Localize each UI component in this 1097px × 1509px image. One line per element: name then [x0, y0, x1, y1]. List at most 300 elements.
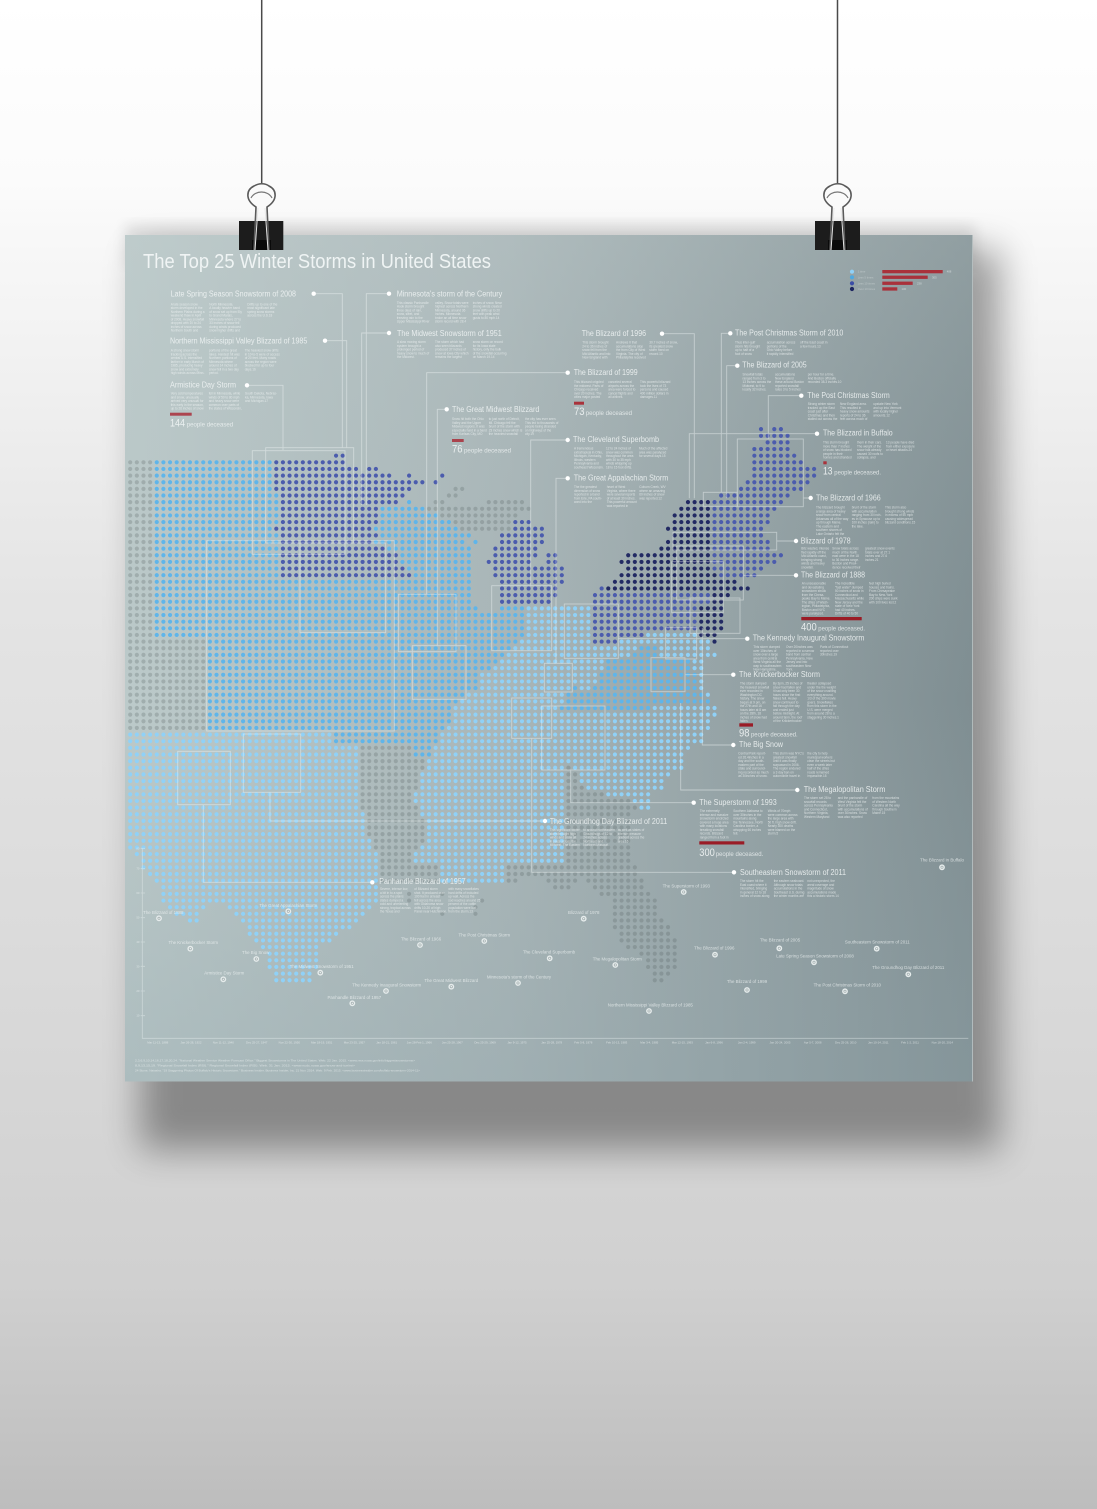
body text: everything around. — [807, 693, 833, 697]
body text: a bit in to a spot — [380, 891, 402, 895]
body text: the heaviest snowfall — [740, 685, 769, 689]
body text: especially hard in a band — [452, 428, 487, 432]
body text: arrived very unusual for — [171, 399, 204, 403]
body text: all airlines. — [608, 395, 623, 399]
body text: the from City of West — [616, 348, 645, 352]
heading: Blizzard of 1978 — [801, 536, 851, 545]
body text: accumulations atop — [616, 344, 643, 348]
body text: magnitude of snow — [807, 887, 834, 891]
body text: fell in Minnesota, while — [209, 392, 241, 396]
body text: from either exposure — [886, 444, 915, 448]
heading: The Post Christmas Storm of 2010 — [735, 329, 844, 338]
body text: ever recorded in — [740, 689, 763, 693]
body text: The weight of the — [857, 444, 881, 448]
poster background — [125, 235, 973, 1082]
body text: blocked for up to four — [245, 364, 274, 368]
body text: persons and caused — [640, 388, 669, 392]
body text: Much of the affected — [639, 446, 668, 450]
body text: This powerful blizzard — [640, 380, 671, 384]
body text: theater collapsed — [807, 682, 831, 686]
body text: dimension of snow — [574, 489, 601, 493]
heading: The Superstorm of 1993 — [699, 798, 777, 807]
y-axis labels: 60 — [136, 891, 140, 895]
body text: Arkansas all of the way — [816, 517, 849, 521]
body text: North Minnesota. — [209, 302, 233, 306]
body text: storm record with 28.4 — [435, 320, 466, 324]
body text: snowfall. — [801, 565, 814, 569]
panel: The Big Snow — [731, 740, 835, 778]
body text: Northern South and — [171, 329, 198, 333]
body text: 30inches.19 — [820, 652, 837, 656]
body text: staggering 30 inches.1 — [807, 715, 839, 719]
body text: the heaviest snowfall — [489, 432, 518, 436]
deaths bar — [699, 841, 744, 844]
deaths count: 73 — [574, 406, 584, 418]
body text: of 2008. Heavy snowfall — [171, 317, 204, 321]
date labels: Nov 11-12, 1940 — [213, 1040, 234, 1044]
body text: amounts.12 — [873, 413, 890, 417]
storm point labels: Late Spring Season Snowstorm of 2008 — [776, 954, 854, 958]
panel: The Knickerbocker Storm — [731, 670, 839, 740]
body text: Boston and NYC — [802, 608, 826, 612]
panel: The Kennedy Inaugural Snowstorm — [745, 634, 865, 672]
body text: The cities of Wash- — [802, 600, 828, 604]
body text: until it was finally — [773, 759, 797, 763]
legend swatches — [850, 270, 854, 291]
body text: Northeast and — [583, 839, 603, 843]
body text: West Virginia felt the — [838, 800, 867, 804]
heading: The Big Snow — [739, 740, 783, 749]
body text: of the snow crushing — [807, 689, 836, 693]
body text: this early in the season, — [171, 403, 204, 407]
body text: from around 28 to a — [807, 712, 835, 716]
storm point labels: The Superstorm of 1993 — [663, 884, 711, 888]
deaths count: 300 — [699, 847, 715, 859]
body text: reported over — [820, 649, 839, 653]
legend values: 238 — [917, 281, 922, 285]
body text: inches of snow had — [740, 715, 767, 719]
body text: not unexpected, the — [807, 879, 835, 883]
body text: impassible.18 — [807, 774, 827, 778]
body text: hours since the first — [773, 693, 800, 697]
body text: surpassed in 2006. — [773, 763, 800, 767]
panel: The Blizzard of 1888 — [794, 570, 898, 634]
left binder clip — [239, 184, 283, 250]
body text: snow over a large — [753, 652, 778, 656]
heading: The Blizzard of 2005 — [742, 361, 807, 370]
body text: for its Iowa state — [473, 344, 496, 348]
body text: ranging from 30 inch- — [852, 513, 881, 517]
y-axis labels: 70 — [136, 867, 140, 871]
body text: reported in a narrow — [786, 649, 815, 653]
body text: shot. It produced over — [414, 891, 445, 895]
body text: snow fell in a two day — [209, 367, 239, 371]
body text: portions of the — [767, 344, 787, 348]
right hanging string — [836, 0, 838, 183]
body text: Ohio Valley before — [767, 348, 793, 352]
body text: Chicago received — [574, 388, 599, 392]
body text: over 20 inches. The — [574, 391, 602, 395]
body text: of snow has blocked — [823, 448, 852, 452]
body text: central U.S. intensified — [171, 356, 202, 360]
body text: and Connecticut, — [804, 807, 828, 811]
y-axis labels: 30 — [136, 964, 140, 968]
body text: An unseasonable — [802, 582, 826, 586]
body text: state and surround- — [738, 766, 766, 770]
body text: across the U.S.18 — [247, 314, 273, 318]
body text: the city to help — [807, 752, 828, 756]
body text: southeastern New — [786, 664, 812, 668]
medium blue dots: less than 5 times — [157, 462, 709, 754]
body text: was reported in — [607, 504, 628, 508]
right binder clip — [815, 184, 860, 250]
body text: in place across the — [550, 839, 576, 843]
body text: produced 37 inches of — [435, 348, 466, 352]
body text: Severe, intense low, — [380, 887, 408, 891]
poster shadow — [125, 225, 1000, 1150]
title: The Top 25 Winter Storms in United States — [143, 251, 491, 273]
body text: up through Maine. — [816, 520, 841, 524]
timeline axes — [141, 848, 968, 1038]
body text: The extremely — [700, 809, 720, 813]
body text: accumulations — [775, 372, 796, 376]
body text: breaking snowfall — [700, 828, 724, 832]
body text: This storm was NYC's — [773, 752, 804, 756]
body text: houses and trains. — [869, 585, 895, 589]
body text: Maine.15 — [872, 811, 885, 815]
body text: of snow set up from Ely — [209, 310, 242, 314]
panel: Armistice Day Storm: people deceased — [187, 422, 234, 429]
body text: during winds produced — [209, 325, 241, 329]
body text: inches of snow across — [171, 325, 202, 329]
body text: East coast where it — [740, 883, 767, 887]
body text: inches of snow along — [740, 894, 770, 898]
body text: Jersey and into — [786, 660, 808, 664]
body text: rates 3 to 5 inches — [775, 388, 801, 392]
body text: a 3 day ban on — [773, 770, 794, 774]
date labels: Jan 2-4, 1999 — [738, 1040, 756, 1044]
legend labels: Less 10 times — [858, 281, 876, 285]
poster content — [130, 251, 968, 1072]
body text: were common across — [768, 813, 798, 817]
body text: as well as states of — [618, 828, 644, 832]
heading: The Blizzard in Buffalo — [823, 429, 893, 438]
heading: The Great Appalachian Storm — [574, 473, 669, 482]
heading: The Blizzard of 1966 — [816, 493, 881, 502]
body text: storm.5 — [768, 832, 778, 836]
panel: The Groundhog Day Blizzard of 2011 — [543, 817, 668, 847]
body text: Carolina border, a — [733, 824, 759, 828]
legend values — [902, 270, 952, 291]
body text: Michigan, Kentucky, — [574, 454, 602, 458]
body text: A tremendous — [574, 446, 594, 450]
body text: foot of snow — [735, 352, 753, 356]
body text: feet with peak wind — [473, 312, 500, 316]
body text: The region endured — [773, 766, 801, 770]
body text: damages.11 — [640, 395, 657, 399]
body text: the states of Wisconsin, — [209, 406, 242, 410]
body text: over 30inches in the — [733, 813, 762, 817]
deaths count: 13 — [823, 465, 832, 477]
body text: The incredible — [835, 582, 855, 586]
panel: The Great Midwest Blizzard — [444, 405, 558, 455]
body text: intense and massive — [700, 813, 729, 817]
heading: The Groundhog Day Blizzard of 2011 — [550, 817, 668, 826]
body text: period. — [209, 371, 219, 375]
body text: feet across much of — [840, 417, 868, 421]
body text: snowfall records — [804, 800, 827, 804]
body text: it rapidly intensified — [767, 352, 794, 356]
date labels — [147, 1040, 953, 1044]
panel: The Blizzard of 1996 — [582, 329, 678, 360]
body text: to Grand Marais, — [209, 314, 233, 318]
body text: Snowfall totals — [742, 372, 763, 376]
body text: Very cold temperatures — [171, 392, 203, 396]
body text: across the region were — [245, 360, 277, 364]
deaths bar — [170, 413, 192, 416]
body text: more than 7 inches — [823, 444, 850, 448]
body text: snow from central — [816, 513, 841, 517]
panel: Late Spring Season Snowstorm of 2008 — [171, 290, 316, 333]
heading: The Post Christmas Storm — [807, 391, 890, 400]
body text: snow storm on record — [473, 340, 503, 344]
heading: Armistice Day Storm — [170, 380, 236, 389]
body text: 12 to 24 inches of — [606, 446, 631, 450]
body text: cancel flights and — [608, 391, 633, 395]
body text: tracked up the East — [808, 406, 835, 410]
date labels: Jan 25-28, 1967 — [442, 1040, 463, 1044]
body text: tracking across the — [171, 352, 197, 356]
body text: of the snowfall occurring — [473, 351, 507, 355]
body text: Philadelphia received — [616, 356, 646, 360]
body text: half of the cities — [807, 766, 830, 770]
body text: from Erie, PA south- — [574, 496, 602, 500]
body text: ranged from 3 to — [742, 376, 766, 380]
body text: people being stranded — [525, 424, 556, 428]
body text: caused 30 roofs to — [857, 452, 883, 456]
date labels: Jan 6-8, 1996 — [705, 1040, 723, 1044]
body text: Drifts of 40 to 50 — [835, 612, 858, 616]
body text: 400 million dollars in — [640, 391, 669, 395]
heading: Southeastern Snowstorm of 2011 — [740, 868, 846, 877]
body text: ington, Philadelphia, — [802, 604, 830, 608]
body text: around 9pm, the roof — [773, 715, 802, 719]
body text: took the lives of 73 — [640, 384, 666, 388]
body text: up wall. Across the — [448, 895, 475, 899]
deaths bar — [823, 461, 827, 464]
legend labels — [858, 270, 876, 291]
deaths count: 76 — [452, 443, 462, 455]
body text: New England — [775, 376, 794, 380]
body text: it had only been 30 — [773, 689, 800, 693]
body text: high winds across Minn- — [171, 371, 204, 375]
body text: highest across Northern — [435, 305, 469, 309]
y-axis labels: 40 — [136, 940, 140, 944]
body text: area from central — [753, 656, 777, 660]
body text: heavy snow amounts — [840, 410, 870, 414]
body text: most significant late — [247, 306, 275, 310]
body text: Nearly 300 deaths — [768, 824, 794, 828]
body text: of Blizzard storm — [414, 887, 438, 891]
heading: The Megalopolitan Storm — [804, 785, 886, 794]
body text: freezing rain to the — [397, 316, 423, 320]
body text: 50 ft. high snow drift. — [768, 820, 797, 824]
body text: area were forced to — [608, 388, 636, 392]
storm point labels: The Blizzard of 1888 — [143, 910, 184, 915]
body text: ka, Minnesota, Iowa — [245, 395, 273, 399]
body text: areal coverage and — [807, 883, 834, 887]
body text: 13 inches across the — [742, 380, 772, 384]
body text: Connecticut and — [835, 593, 858, 597]
body text: lakes. Hardest hit was — [209, 352, 240, 356]
body text: percent of the cattle — [448, 902, 476, 906]
body text: fallen. — [740, 719, 749, 723]
body text: on March 19.14 — [473, 355, 495, 359]
heading: The Blizzard of 1996 — [582, 329, 646, 338]
body text: heart of West — [607, 485, 625, 489]
deaths bar — [452, 439, 464, 442]
body text: accumulations in the — [774, 887, 803, 891]
date labels: Apr 5-7, 2008 — [804, 1040, 822, 1044]
body text: day and the south- — [738, 759, 764, 763]
body text: Coburn Creek, WV — [639, 485, 667, 489]
body text: states dumped a — [380, 898, 403, 902]
panel: The Post Christmas Storm of 2010 — [728, 329, 844, 356]
body text: through Southern — [872, 807, 897, 811]
body text: fell across the area — [414, 898, 441, 902]
body text: these around Boston — [775, 380, 804, 384]
heading: Minnesota's storm of the Century — [397, 290, 502, 299]
body text: area was paralyzed — [639, 450, 666, 454]
storm point labels: The Blizzard of 1966 — [401, 936, 442, 942]
body text: homes and stranded — [823, 456, 852, 460]
heading: Northern Mississippi Valley Blizzard of 1985 — [170, 336, 308, 345]
body text: dropped with 10 to 24 — [171, 321, 201, 325]
body text: snow at Iowa City which — [435, 351, 469, 355]
body text: 33 inches of snow fell — [209, 321, 240, 325]
footnotes: 24 Stone, Natasha. "19 Staggering Photos Of Buffalo's Historic Snowstorm." Business Insider. Business Insider, Inc. 21 Nov. 2014. Web. 9 Feb. 2015. <www.businessinsider.com/buffalo-snowstorm-2014-11> — [135, 1068, 420, 1072]
body text: Strong winter storm — [808, 402, 835, 406]
body text: The eastern and — [816, 524, 839, 528]
body text: Southeast U.S. during — [774, 890, 805, 894]
body text: population were lost — [448, 906, 476, 910]
storm point labels: Northern Mississippi Valley Blizzard of 1985 — [608, 1002, 693, 1008]
dot-grid map of the United States — [130, 429, 815, 980]
body text: cold and unrelenting — [380, 902, 409, 906]
body text: By 3pm, 25 inches of — [773, 682, 802, 686]
heading: The Blizzard of 1888 — [801, 570, 865, 579]
body text: intense pressure — [618, 832, 641, 836]
date labels: Dec 25-27, 1947 — [246, 1040, 268, 1044]
body text: of at least 30 inches. — [607, 496, 636, 500]
legend labels: 1 time — [858, 270, 866, 274]
body text: over 10inches of — [753, 649, 776, 653]
footnotes: 2,3,6,9,10,14,16,17,18,20,24. "National Weather Service Weather Forecast Office." Biggest Snowstorms in The United States. Web. 22 Jan. 2015. <www.nws.noaa.gov/info/biggestsnowstorms> — [135, 1058, 415, 1062]
body text: record.10 — [649, 352, 663, 356]
body text: or heart attacks.24 — [886, 448, 912, 452]
body text: fell. — [733, 832, 738, 836]
dark blue dots: less than 10 times — [276, 429, 815, 642]
body text: Lake Ontario felt the — [816, 532, 845, 536]
body text: 60 inches of snow — [639, 493, 665, 497]
body text: This led to thousands of — [525, 421, 558, 425]
y-axis labels: 20 — [136, 989, 140, 993]
body text: snow higher drifts and — [209, 329, 240, 333]
storm point labels: The Megalopolitan Storm — [593, 956, 642, 962]
body text: totals ever at 27.1 — [865, 550, 890, 554]
body text: whopping 60 inches — [733, 828, 761, 832]
body text: Pennsylvania and — [574, 462, 599, 466]
body text: throughout the area — [606, 454, 634, 458]
body text: mountains along — [733, 817, 757, 821]
body text: This significant winter — [550, 828, 580, 832]
body text: This storm dumped — [753, 645, 780, 649]
body text: snow drifts up to 20 — [473, 308, 500, 312]
body text: Panel near Hutchinson. — [414, 910, 447, 914]
footnotes: 8,9,13,15,19. "Regional Snowfall Index (RSI)." Regional Snowfall Index (RSI). Web. 31 Jan. 2015. <www.ncdc.noaa.gov/snow-and-ice/rsi> — [135, 1064, 355, 1068]
body text: The heaviest snow drifts — [245, 348, 279, 352]
body text: Midwest. The Eastern — [550, 843, 580, 847]
body text: A slow moving storm — [397, 340, 426, 344]
body text: the Texas and — [380, 910, 400, 914]
legend labels: Less 5 times — [858, 275, 874, 279]
body text: the eastern seaboard. — [774, 879, 804, 883]
body text: 1985, producing heavy — [171, 364, 203, 368]
body text: Mid Atlantic and into — [582, 352, 611, 356]
body text: from the mountains — [872, 796, 900, 800]
body text: 200 ships were sunk — [869, 596, 898, 600]
body text: eastern part of the — [738, 763, 764, 767]
body text: The storm set 28 to — [804, 796, 831, 800]
body text: around 14 inches of — [209, 364, 237, 368]
panel: The Cleveland Superbomb — [566, 435, 668, 469]
body text: brunt of the storm — [838, 804, 863, 808]
date labels: Jan 26-28, 1922 — [181, 1040, 202, 1044]
body text: across Pennsylvania — [804, 804, 833, 808]
legend values: 305 — [932, 275, 937, 279]
storm point labels: The Blizzard of 1999 — [727, 979, 768, 984]
body text: Groundhogs of 12 to — [583, 832, 612, 836]
body text: the midwest. Parts of — [574, 384, 603, 388]
deaths bar — [801, 617, 862, 620]
date labels: Dec 25-29, 1969 — [474, 1040, 496, 1044]
body text: Snow hit both the Ohio — [452, 417, 484, 421]
body text: dence received their — [832, 565, 861, 569]
body text: gradient across the — [618, 836, 645, 840]
body text: hours later at 8 am — [740, 708, 767, 712]
body text: goers. Snowflakes — [807, 700, 833, 704]
body text: history. The snow — [740, 696, 765, 700]
body text: Massachusetts while — [835, 596, 864, 600]
date labels: Mar 12-15, 1993 — [672, 1040, 693, 1044]
date labels: Feb 1-2, 2011 — [901, 1040, 919, 1044]
body text: ranged from a foot in — [700, 835, 729, 839]
y-axis labels — [136, 846, 140, 1018]
body text: upstate New York — [873, 402, 898, 406]
body text: 23 inches snow which is — [489, 428, 523, 432]
body text: inches of snow. Near — [473, 301, 502, 305]
date labels: Mar 3-4, 1985 — [640, 1040, 659, 1044]
body text: had 40 inches. — [835, 608, 856, 612]
body text: a large area of heavy — [816, 509, 846, 513]
body text: strong winds created — [473, 305, 502, 309]
body text: And Boston officially — [808, 376, 836, 380]
body text: es in Syracuse up to — [852, 517, 880, 521]
body text: in 10-to-5 were of access — [245, 352, 280, 356]
body text: Christmas and then — [808, 413, 835, 417]
body text: Parts of Connecticut — [820, 645, 848, 649]
body text: and heavy snow were — [209, 399, 239, 403]
